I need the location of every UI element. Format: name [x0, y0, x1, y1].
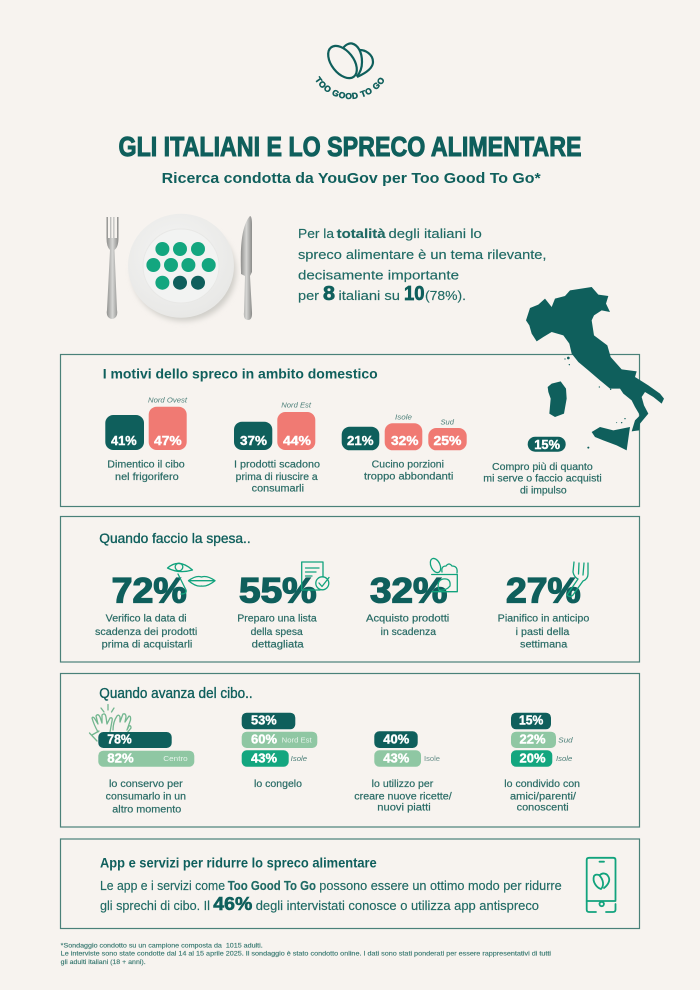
bars: lo condivido: Isole	[556, 754, 572, 763]
intro text: (78%).	[425, 288, 466, 303]
stat: 72%: scadenza dei prodotti	[95, 627, 197, 638]
intro text: 8	[323, 283, 335, 305]
stat: 27%: i pasti della	[516, 627, 570, 638]
text: app description: gli sprechi di cibo. Il	[100, 898, 210, 913]
bars: dimentico il cibo: nel frigorifero	[115, 472, 179, 483]
intro text: spreco alimentare è un tema rilevante,	[298, 247, 546, 262]
bars: porzioni abbondanti	[342, 412, 467, 482]
text: app description	[100, 878, 562, 914]
stat: 27%	[498, 572, 590, 651]
bars: lo conservo: Centro	[163, 754, 188, 763]
bars: prodotti scadono: I prodotti scadono	[234, 460, 320, 471]
bars: porzioni abbondanti: Cucino porzioni	[372, 460, 444, 471]
bars: acquisti di impulso: mi serve o faccio acquisti	[483, 474, 602, 485]
text: app description: degli intervistati conosce o utilizza app antispreco	[256, 898, 539, 913]
icon: high five hands	[90, 704, 131, 741]
intro text: degli italiani lo	[388, 226, 482, 241]
stat: 55%: Preparo una lista	[237, 614, 317, 625]
bars: lo conservo: 82%	[107, 751, 134, 766]
bars: lo condivido: 20%	[520, 751, 546, 766]
bars: lo condivido: Sud	[558, 736, 574, 745]
stat: 72%: prima di acquistarli	[102, 640, 192, 651]
intro text: totalità	[337, 226, 386, 241]
stat: 32%: 32%	[370, 572, 447, 611]
heading: motivi: I motivi dello spreco in ambito domestico	[103, 365, 378, 381]
heading: avanza: Quando avanza del cibo..	[99, 686, 253, 702]
bars: lo condivido: conoscenti	[517, 803, 569, 814]
heading: spesa: Quando faccio la spesa..	[99, 530, 251, 546]
icon: grocery bag	[428, 557, 457, 592]
bars: acquisti di impulso: di impulso	[520, 485, 567, 496]
bars: acquisti di impulso: Compro più di quanto	[492, 462, 593, 473]
stat: 32%	[366, 572, 449, 638]
bars: nuove ricette: nuovi piatti	[377, 803, 431, 814]
bars: porzioni abbondanti: Isole	[395, 412, 412, 421]
footnote	[61, 943, 551, 966]
stat: 32%: in scadenza	[381, 627, 436, 638]
stat: 55%: 55%	[239, 572, 317, 611]
footnote: *Sondaggio condotto su un campione composta da 1015 adulti.	[61, 943, 263, 949]
stat: 32%: Acquisto prodotti	[366, 614, 449, 625]
bars: lo condivido: 15%	[519, 713, 544, 728]
bars: lo conservo: 78%	[107, 732, 132, 747]
text: app description: Too Good To Go	[228, 878, 316, 893]
bars: lo congelo: 60%	[251, 732, 277, 747]
bars: dimentico il cibo: Nord Ovest	[148, 396, 188, 405]
bars: lo congelo: lo congelo	[254, 779, 302, 790]
intro text: Per la	[298, 226, 335, 241]
bars: prodotti scadono: 44%	[283, 433, 311, 448]
illustration: plate with dots, fork and knife	[106, 214, 252, 321]
map of Italy	[526, 287, 664, 450]
icon: phone with app	[587, 858, 616, 912]
stat: 55%	[237, 572, 317, 651]
icon: eye, nose and lips	[168, 563, 215, 594]
subtitle: Ricerca condotta da YouGov per Too Good To Go*	[162, 170, 541, 187]
bars: lo congelo: Isole	[291, 754, 307, 763]
bars: dimentico il cibo: 47%	[154, 433, 182, 448]
stat: 27%: Pianifico in anticipo	[498, 614, 590, 625]
title: GLI ITALIANI E LO SPRECO ALIMENTARE	[118, 131, 582, 162]
bars: porzioni abbondanti: 21%	[347, 433, 374, 448]
bars: nuove ricette: Isole	[424, 754, 440, 763]
bars: lo condivido: 22%	[520, 732, 546, 747]
bars: dimentico il cibo: Dimentico il cibo	[107, 460, 185, 471]
bars: lo congelo: 43%	[251, 751, 277, 766]
panel: app e servizi	[60, 839, 640, 928]
text: app description: possono essere un ottimo modo per ridurre	[319, 878, 562, 893]
bars: lo condivido	[504, 713, 580, 814]
bars: dimentico il cibo	[105, 396, 188, 483]
bars: porzioni abbondanti: troppo abbondanti	[364, 471, 453, 482]
bars: porzioni abbondanti: 32%	[391, 433, 419, 448]
bars: lo congelo: Nord Est	[282, 736, 313, 745]
bars: prodotti scadono: prima di riuscire a	[236, 472, 318, 483]
heading: app: App e servizi per ridurre lo spreco alimentare	[100, 855, 377, 870]
bars: lo conservo: lo conservo per	[109, 779, 183, 790]
bars: acquisti di impulso	[483, 437, 602, 496]
intro text: 10	[404, 283, 424, 305]
stat: 27%: settimana	[520, 640, 568, 651]
bars: lo condivido: lo condivido con	[504, 779, 580, 790]
stat: 72%: Verifico la data di	[106, 614, 187, 625]
bars: nuove ricette	[354, 731, 452, 814]
panel: motivi dello spreco	[60, 354, 640, 506]
bars: prodotti scadono	[234, 400, 320, 495]
bars: prodotti scadono: Nord Est	[281, 400, 312, 409]
bars: lo congelo	[242, 713, 317, 790]
intro text: italiani su	[338, 288, 400, 303]
bars: porzioni abbondanti: 25%	[434, 433, 462, 448]
intro text: decisamente importante	[298, 268, 459, 282]
bars: lo congelo: 53%	[251, 713, 277, 728]
bars: dimentico il cibo: 41%	[111, 433, 137, 448]
icon: fork	[567, 562, 588, 596]
text: app description: Le app e i servizi come	[100, 878, 225, 893]
text: app description: 46%	[213, 894, 252, 914]
bars: acquisti di impulso: 15%	[534, 437, 560, 452]
stat: 27%: 27%	[506, 572, 581, 611]
panel: quando avanza del cibo	[60, 674, 640, 827]
footnote: gli adulti italiani (18 + anni).	[61, 960, 146, 966]
logo: Too Good To Go: TOO GOOD TO GO	[316, 76, 384, 100]
stat: 55%: dettagliata	[252, 640, 304, 651]
bars: prodotti scadono: 37%	[240, 433, 267, 448]
bars: lo condivido: amici/parenti/	[510, 791, 576, 802]
stat: 55%: della spesa	[251, 627, 303, 638]
bars: nuove ricette: 43%	[383, 751, 410, 766]
footnote: Le interviste sono state condotte dal 14 al 15 aprile 2025. Il sondaggio è stato condotto online. I dati sono stati ponderati per essere rappresentativi di tutti	[61, 952, 551, 958]
bars: lo conservo	[98, 732, 194, 816]
bars: lo conservo: consumarlo in un	[106, 792, 186, 803]
panel: quando faccio la spesa	[60, 516, 640, 662]
stat: 72%	[95, 572, 197, 651]
bars: nuove ricette: creare nuove ricette/	[354, 791, 452, 802]
bars: nuove ricette: 40%	[383, 732, 410, 747]
stat: 72%: 72%	[112, 572, 187, 611]
bars: prodotti scadono: consumarli	[252, 484, 304, 495]
intro text: per	[298, 288, 320, 303]
bars: nuove ricette: lo utilizzo per	[372, 779, 434, 790]
bars: porzioni abbondanti: Sud	[440, 417, 455, 426]
logo: Too Good To Go	[316, 42, 384, 100]
bars: lo conservo: altro momento	[112, 805, 182, 816]
icon: shopping list	[302, 562, 329, 590]
intro text	[298, 226, 546, 305]
